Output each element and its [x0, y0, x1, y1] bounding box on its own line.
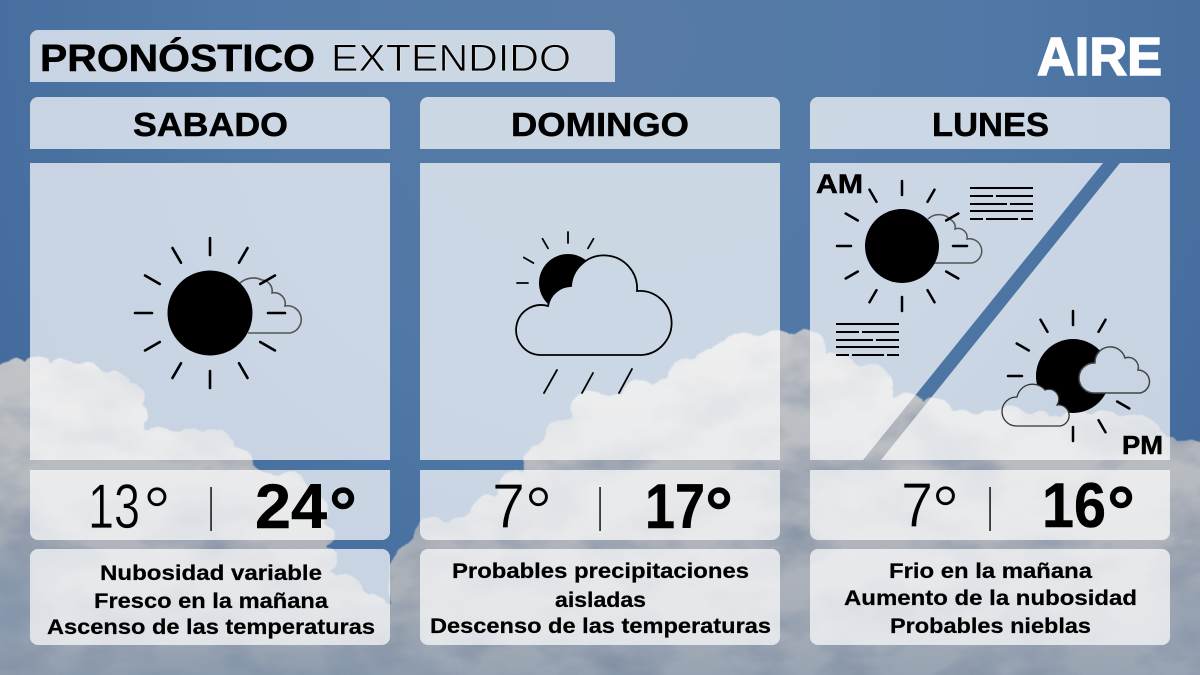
temperature panel: sabado: ° [329, 473, 357, 551]
day header: domingo: DOMINGO [511, 106, 689, 143]
panel: sabado [30, 97, 390, 645]
weather image panel: lunes, split diagonally [810, 163, 1170, 460]
day header: sabado: SABADO [133, 106, 288, 143]
description panel: sabado: Ascenso de las temperaturas [47, 615, 375, 639]
description panel: lunes [810, 549, 1170, 645]
day header: domingo [420, 97, 780, 149]
icon: fog lines lower [836, 324, 899, 355]
description panel: lunes: Frio en la mañana [889, 559, 1093, 583]
panel: lunes [810, 97, 1170, 645]
temperature panel: sabado: 13 [88, 472, 140, 542]
temperature panel: lunes: ° [1107, 472, 1135, 550]
description panel: lunes: Aumento de la nubosidad [844, 586, 1137, 610]
description panel: sabado: Fresco en la mañana [94, 589, 329, 613]
icon: PM sun with two clouds [1002, 311, 1149, 441]
description panel: domingo: aisladas [555, 588, 646, 612]
icon: sun behind rain cloud [516, 232, 672, 393]
description panel: domingo: Probables precipitaciones [452, 559, 749, 583]
temperature panel: sabado: ° [143, 473, 171, 551]
temperature panel: domingo: ° [524, 473, 552, 551]
label: AM: AM [816, 169, 863, 199]
weather image panel: sabado [30, 163, 390, 460]
temperature panel: lunes: ° [932, 472, 960, 550]
temperature panel: lunes: 7 [901, 471, 933, 541]
weather image panel: domingo [420, 163, 780, 460]
temperature panel: domingo: ° [705, 473, 733, 551]
description panel: domingo: Descenso de las temperaturas [430, 614, 771, 638]
temperature panel: lunes [810, 470, 1170, 550]
temperature panel: sabado: 24 [255, 472, 327, 542]
temperature panel: domingo [420, 470, 780, 551]
label: PM: PM [1122, 430, 1163, 460]
description panel: sabado: Nubosidad variable [100, 561, 322, 585]
title bar [30, 30, 615, 82]
panel: domingo [420, 97, 780, 645]
icon: sun with small cloud [135, 238, 301, 388]
temperature panel: domingo: 7 [492, 472, 525, 542]
icon: AM sun with small cloud [837, 181, 982, 311]
day header: lunes [810, 97, 1170, 149]
title: light part: EXTENDIDO [331, 38, 571, 80]
background: cloud shadow patches [0, 545, 1200, 675]
logo: AIRE: AIRE [1037, 27, 1162, 87]
description panel: domingo [420, 549, 780, 645]
icon: fog lines upper [970, 188, 1033, 219]
description panel: sabado [30, 549, 390, 645]
temperature panel: lunes: 16 [1042, 471, 1106, 541]
background: clouds [0, 330, 1200, 675]
title: bold part: PRONÓSTICO [40, 36, 315, 80]
description panel: lunes: Probables nieblas [890, 614, 1091, 638]
day header: sabado [30, 97, 390, 149]
day header: lunes: LUNES [932, 106, 1049, 143]
temperature panel: domingo: 17 [645, 472, 705, 542]
temperature panel: sabado [30, 470, 390, 551]
